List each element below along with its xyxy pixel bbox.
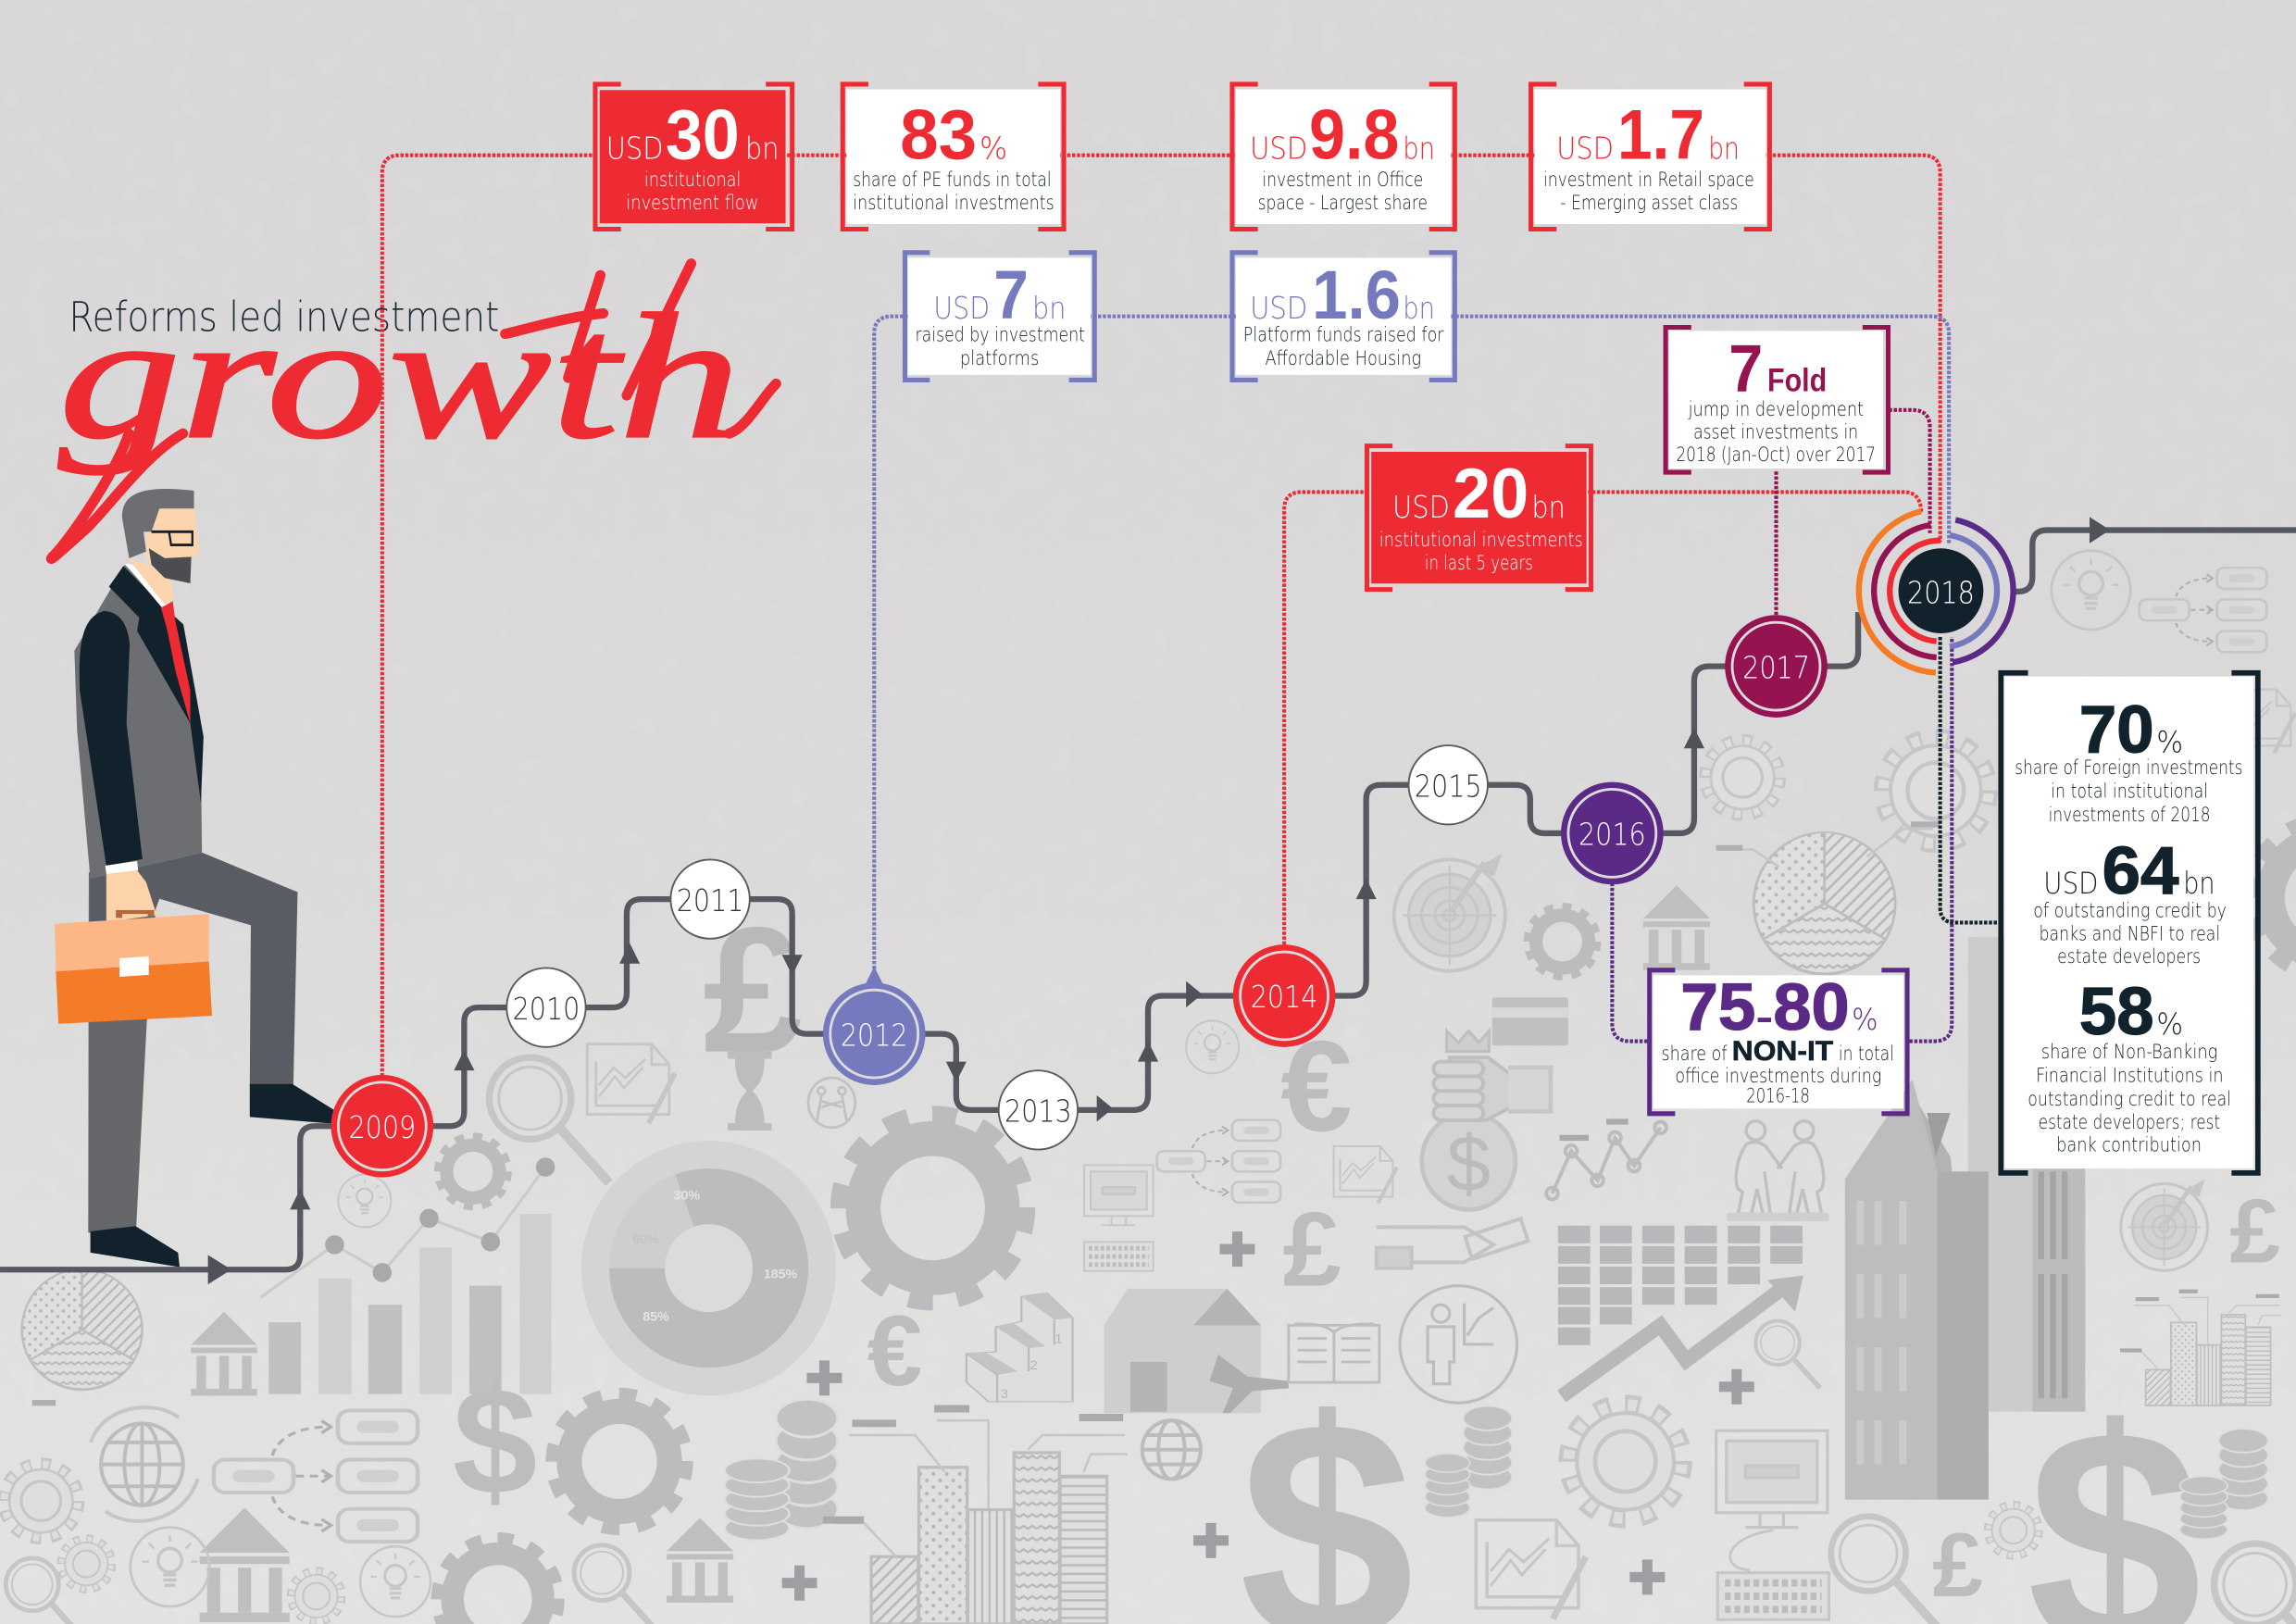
stat 58 percent: share of Non-Banking — [2041, 1040, 2217, 1063]
stat 58 percent: % — [2156, 1008, 2183, 1042]
raised leg — [91, 853, 297, 1085]
calendar grid — [1558, 1226, 1803, 1345]
filled gears — [440, 823, 2296, 1624]
plus signs — [782, 1231, 1754, 1601]
donut chart — [581, 1141, 836, 1395]
flow diagrams — [214, 568, 2266, 1542]
stat 58 percent: 58 — [2079, 974, 2154, 1049]
currency symbols: € — [867, 1295, 922, 1406]
target icons — [1394, 856, 2208, 1270]
callout: USD 30 bn: 30 — [666, 96, 740, 175]
money bag, fist and card — [1422, 997, 1568, 1209]
stat USD 64 bn — [2033, 833, 2227, 968]
currency symbols: € — [1280, 1015, 1353, 1158]
callout: USD 20 bn: USD — [1392, 489, 1450, 525]
2014 node — [1233, 944, 1335, 1047]
callout: USD 1.7 bn: 1.7 — [1617, 96, 1704, 175]
callout: USD 1.6 bn: 1.6 — [1312, 256, 1401, 333]
callout: 75-80 percent: in total — [1839, 1042, 1894, 1065]
hourglass — [728, 1052, 772, 1131]
callout: 83 percent: % — [980, 131, 1007, 167]
stepped timeline path — [0, 517, 2296, 1284]
open book — [1289, 1324, 1379, 1382]
standing leg — [88, 862, 159, 1232]
donut chart: 60% — [632, 1232, 659, 1247]
stat USD 64 bn: bn — [2183, 865, 2215, 901]
year nodes — [331, 511, 2014, 1178]
callout: USD 9.8 bn: space - Largest share — [1258, 191, 1428, 214]
callout: USD 7 bn: USD — [933, 290, 990, 326]
money bag, fist and card: $ — [1447, 1120, 1491, 1208]
2012 node: 2012 — [841, 1017, 908, 1053]
arm — [80, 611, 143, 866]
callout: 75-80 percent: 80 — [1773, 971, 1850, 1044]
stat 70 percent — [2015, 692, 2242, 826]
decorative swashes — [51, 264, 776, 558]
2011 node — [670, 859, 750, 939]
callout: USD 9.8 bn: USD — [1250, 131, 1307, 167]
stairs: 2 — [1030, 1357, 1038, 1372]
stat 70 percent: investments of 2018 — [2049, 803, 2211, 826]
currency symbols: £ — [1282, 1192, 1341, 1309]
head — [122, 489, 200, 605]
globes — [91, 1407, 1201, 1521]
callout: 75-80 percent: share of — [1662, 1042, 1728, 1065]
callout: USD 1.7 bn: bn — [1708, 131, 1740, 167]
rising arrow — [1562, 1276, 1803, 1396]
callout: 83 percent: institutional investments — [853, 191, 1054, 214]
callout: 75-80 percent: 75 — [1680, 971, 1755, 1044]
stairs — [967, 1293, 1073, 1402]
callout: 7 Fold: 7 — [1728, 331, 1763, 406]
red tie — [161, 601, 191, 723]
stat 58 percent: Financial Institutions in — [2036, 1063, 2224, 1086]
title line: Reforms led investment — [69, 294, 499, 341]
2014 node: 2014 — [1251, 979, 1317, 1015]
callout: USD 20 bn: in last 5 years — [1425, 551, 1533, 574]
2009 node: 2009 — [348, 1109, 416, 1145]
callout: USD 7 bn: 7 — [993, 256, 1029, 333]
callout: 75-80 percent: - — [1755, 995, 1773, 1038]
currency symbols: £ — [1932, 1514, 1983, 1616]
background icon collage — [4, 551, 2296, 1624]
callout: USD 20 bn — [1366, 446, 1591, 590]
callout: USD 1.6 bn: bn — [1403, 290, 1435, 326]
coin stacks — [725, 1399, 2268, 1540]
callout: 7 Fold — [1666, 327, 1889, 472]
heading — [51, 264, 776, 558]
callout: 75-80 percent: 2016-18 — [1746, 1083, 1810, 1106]
light bulb icons — [131, 551, 2130, 1617]
red connector 2014 — [1284, 492, 1921, 944]
callout: USD 1.6 bn: USD — [1250, 290, 1307, 326]
2015 node: 2015 — [1415, 768, 1482, 804]
purple connector 2016 — [1612, 883, 1647, 1042]
callout: USD 30 bn: USD — [606, 131, 663, 167]
callout: USD 1.7 bn — [1531, 84, 1769, 230]
magenta connector right — [1889, 410, 1930, 533]
stat 70 percent: % — [2156, 726, 2183, 759]
stat 58 percent — [2028, 974, 2231, 1156]
bar chart with trend line — [261, 1157, 555, 1394]
briefcase — [55, 910, 212, 1024]
callout: USD 7 bn: bn — [1032, 290, 1066, 326]
stat 70 percent: in total institutional — [2051, 780, 2208, 803]
2013 node — [999, 1070, 1078, 1150]
callout: USD 30 bn: investment flow — [626, 191, 758, 214]
donut chart: 185% — [764, 1268, 798, 1282]
stat USD 64 bn: of outstanding credit by — [2033, 899, 2227, 922]
stat 58 percent: bank contribution — [2056, 1132, 2202, 1156]
callout: 7 Fold: asset investments in — [1693, 420, 1858, 443]
handshake circle — [808, 1078, 855, 1128]
purple connector right — [1909, 637, 1952, 1042]
stat 58 percent: estate developers; rest — [2039, 1110, 2220, 1133]
callout: 75-80 percent: % — [1852, 1004, 1878, 1037]
2016 node — [1561, 782, 1664, 884]
shirt and dark lapel — [109, 566, 204, 803]
callout: USD 1.6 bn: Platform funds raised for — [1243, 323, 1444, 346]
callout: 7 Fold: Fold — [1767, 363, 1827, 398]
callout: USD 20 bn: 20 — [1453, 455, 1529, 533]
stat USD 64 bn: USD — [2043, 868, 2098, 901]
2018 node with rings: 2018 — [1907, 575, 1975, 611]
callout: USD 7 bn: platforms — [960, 346, 1039, 369]
arrowheads — [208, 517, 2110, 1284]
document chart icons — [587, 690, 2295, 1618]
callout: USD 7 bn: raised by investment — [916, 323, 1085, 346]
hand holding cash — [1377, 1218, 1528, 1268]
donut chart: 30% — [674, 1188, 700, 1203]
2017 node — [1725, 615, 1828, 718]
callout: USD 1.7 bn: - Emerging asset class — [1560, 191, 1738, 214]
blue connector — [874, 317, 1949, 974]
stat USD 64 bn: 64 — [2103, 833, 2179, 908]
2015 node — [1409, 745, 1488, 824]
currency symbols — [453, 890, 2280, 1624]
stat 58 percent: outstanding credit to real — [2028, 1087, 2231, 1110]
callout: USD 30 bn: institutional — [644, 168, 741, 191]
2018 node with rings — [1859, 511, 2014, 673]
2011 node: 2011 — [677, 882, 743, 918]
collar — [125, 564, 174, 612]
callout: USD 9.8 bn: 9.8 — [1309, 96, 1399, 175]
callout: 75-80 percent: NON-IT — [1732, 1036, 1834, 1067]
donut chart: 85% — [643, 1310, 669, 1325]
callout: USD 1.7 bn: USD — [1556, 131, 1614, 167]
callout: USD 9.8 bn — [1232, 84, 1454, 230]
tower building — [1845, 937, 2085, 1500]
callout: USD 1.7 bn: investment in Retail space — [1543, 168, 1754, 191]
stat 70 percent: share of Foreign investments — [2015, 756, 2242, 779]
2010 node — [506, 968, 586, 1047]
callout: USD 30 bn: bn — [745, 131, 779, 167]
house and plane — [1104, 1289, 1289, 1413]
callout: 7 Fold: 2018 (Jan-Oct) over 2017 — [1676, 443, 1876, 466]
stat 70 percent: 70 — [2079, 692, 2154, 767]
callout: USD 9.8 bn: bn — [1403, 131, 1435, 167]
businessman figure — [55, 489, 340, 1268]
pie charts — [22, 824, 1940, 1403]
2012 node — [823, 967, 926, 1085]
hand — [106, 870, 156, 922]
red connector top — [382, 156, 1940, 1076]
stairs: 3 — [1001, 1386, 1008, 1401]
stairs: 1 — [1055, 1331, 1063, 1345]
bank icons — [191, 885, 1710, 1622]
jacket — [74, 565, 202, 879]
script word growth: growth — [58, 277, 741, 475]
outline gears — [4, 737, 2039, 1622]
callout: USD 20 bn: institutional investments — [1379, 528, 1583, 551]
handshake people — [1727, 1121, 1828, 1221]
2009 node — [331, 1075, 433, 1178]
city building charts — [823, 1292, 2281, 1624]
currency symbols: £ — [703, 890, 803, 1090]
2016 node: 2016 — [1578, 817, 1646, 853]
dotted connector lines — [382, 156, 1999, 1076]
callout: 7 Fold: jump in development — [1688, 397, 1864, 420]
magenta connector 2017 — [1775, 471, 1778, 615]
callout: 83 percent: 83 — [900, 96, 977, 175]
callout: USD 20 bn: bn — [1531, 489, 1566, 525]
callout: USD 7 bn — [905, 253, 1094, 380]
stat USD 64 bn: estate developers — [2057, 944, 2201, 968]
callout: 75-80 percent: office investments during — [1675, 1064, 1881, 1087]
navy connector — [1940, 637, 1999, 922]
callout: USD 9.8 bn: investment in Office — [1262, 168, 1423, 191]
callout: USD 1.6 bn: Affordable Housing — [1266, 346, 1421, 369]
callout: USD 30 bn — [595, 84, 792, 230]
2013 node: 2013 — [1004, 1093, 1072, 1130]
currency symbols: $ — [453, 1355, 537, 1526]
callout: 75-80 percent — [1650, 970, 1907, 1114]
presenter circle — [1400, 1286, 1517, 1403]
line chart with rings — [1546, 1122, 1666, 1199]
callout: USD 1.6 bn — [1232, 253, 1454, 380]
shoes — [91, 1084, 340, 1268]
computers — [1084, 1165, 1828, 1619]
callout panel: 2018 statistics — [2001, 673, 2258, 1173]
stat USD 64 bn: banks and NBFI to real — [2040, 922, 2220, 945]
2010 node: 2010 — [513, 991, 580, 1027]
currency symbols: £ — [2229, 1180, 2280, 1281]
magnifier icons — [6, 1057, 2296, 1624]
2017 node: 2017 — [1742, 649, 1810, 685]
cuff — [106, 861, 138, 874]
callout: 83 percent — [842, 84, 1064, 230]
callout: 83 percent: share of PE funds in total — [853, 168, 1052, 191]
